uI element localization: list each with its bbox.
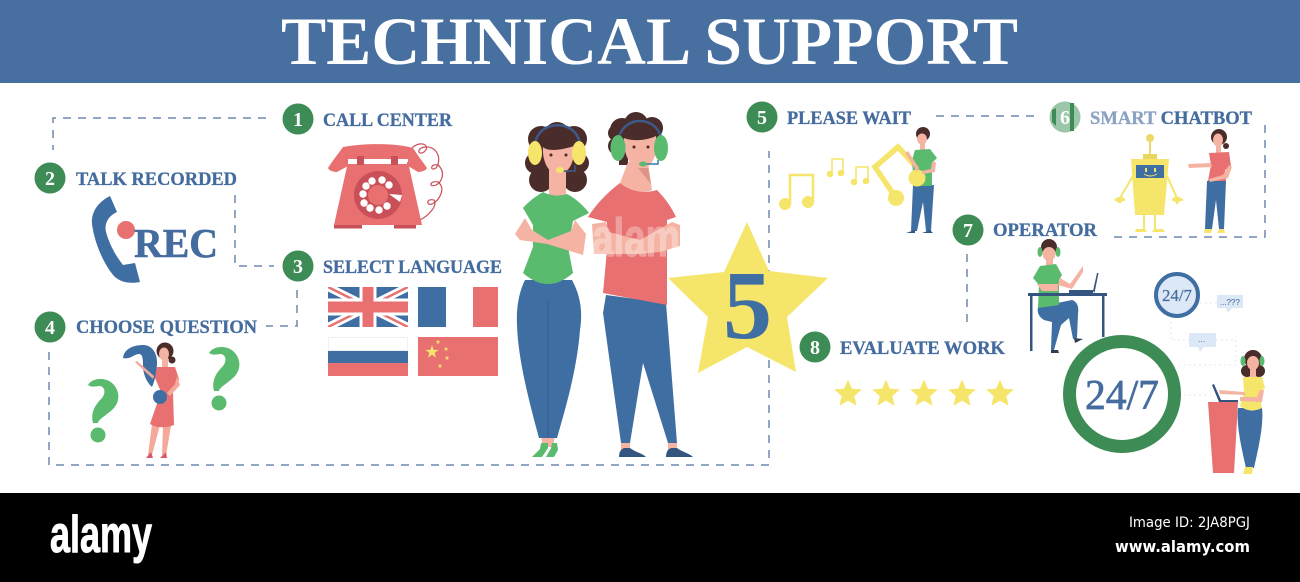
badge 7: 7: [963, 220, 973, 242]
badge 2: [34, 162, 66, 194]
icon: handset with REC: REC: [134, 220, 218, 266]
faint dotted links: [1171, 303, 1236, 395]
eyes and mouth: [550, 154, 568, 156]
red t-shirt: [588, 183, 676, 305]
badge 2: 2: [45, 168, 55, 190]
step 6: smart chatbot: [1050, 102, 1252, 233]
headset: [610, 121, 668, 166]
figure: woman with question mark: [123, 342, 180, 458]
badge 1: 1: [293, 109, 303, 131]
neck shadow: [638, 168, 651, 184]
icon: green question mark left: [88, 379, 118, 442]
image id: Image ID: 2JA8PGJ: [1129, 515, 1250, 531]
speech bubble: question: ...???: [1220, 297, 1240, 307]
flag: france: [418, 287, 498, 327]
shoes: [619, 448, 693, 457]
badge 6: 6: [1060, 107, 1070, 129]
logo: alamy: alamy: [50, 506, 152, 564]
step 1: call center: [282, 104, 452, 228]
flag: china: [418, 337, 498, 376]
badge 3: [282, 250, 314, 282]
central figure: male operator: [588, 112, 693, 457]
five star rating: [834, 380, 1014, 406]
large 24/7 ring: 24/7: [1085, 373, 1159, 419]
badge 4: [34, 312, 66, 342]
badge 7: [952, 214, 984, 246]
heading: call center: CALL CENTER: [323, 110, 452, 131]
speech bubble: dots: ...: [1198, 334, 1205, 344]
large 24/7 ring: [1070, 342, 1174, 446]
central figure: female operator: [515, 122, 589, 457]
eyes: [632, 146, 650, 148]
face: [624, 136, 656, 168]
heading: choose question: CHOOSE QUESTION: [76, 317, 257, 338]
watermark: alam: [592, 208, 680, 268]
step 5: please wait: [746, 102, 937, 233]
face: [543, 146, 574, 174]
figure: standing woman with laptop: [1208, 350, 1265, 474]
title banner: [0, 0, 1300, 83]
green blouse: [523, 192, 589, 284]
dashed connectors between steps: [49, 116, 1265, 465]
flag: united kingdom: [328, 287, 408, 327]
icon: rotary telephone: [328, 144, 442, 228]
hair: [525, 122, 589, 192]
trousers: [517, 280, 581, 438]
hair: [608, 112, 663, 165]
heading: smart chatbot: SMART CHATBOT: [1090, 108, 1252, 129]
headset: [528, 125, 586, 173]
trouser crease: [547, 300, 549, 438]
step 4: choose question: [34, 312, 257, 458]
trousers: [603, 295, 677, 443]
badge 5: 5: [757, 107, 767, 129]
step 7: operator: [952, 214, 1107, 353]
small 24/7 ring: [1156, 274, 1198, 316]
badge 4: 4: [45, 317, 55, 339]
badge 3: 3: [293, 256, 303, 278]
badge 8: [800, 332, 830, 362]
heading: evaluate work: EVALUATE WORK: [840, 338, 1005, 359]
title banner: TECHNICAL SUPPORT: [281, 3, 1018, 79]
badge 1: [282, 104, 314, 134]
step 3: select language: [282, 250, 502, 376]
heading: operator: OPERATOR: [993, 220, 1097, 241]
ankles: [541, 436, 555, 447]
heading: select language: SELECT LANGUAGE: [323, 257, 502, 278]
big yellow star with 5: 5: [723, 252, 772, 360]
24/7 support cluster: [1070, 274, 1265, 474]
badge 5: [746, 102, 778, 132]
icon: musical notes: [780, 147, 919, 210]
crossed arms: [592, 222, 680, 254]
speech bubble: dots: [1189, 333, 1216, 352]
figure: seated operator at desk: [1028, 239, 1107, 353]
step 2: talk recorded: [34, 162, 237, 283]
badge 6: [1050, 102, 1080, 132]
flag: russia: [328, 338, 408, 376]
heading: talk recorded: TALK RECORDED: [76, 169, 237, 190]
figure: man holding note: [905, 127, 937, 233]
step 8: evaluate work: [800, 332, 1014, 406]
speech bubble: question: [1217, 295, 1243, 313]
website: www.alamy.com: [1115, 537, 1250, 556]
neck: [549, 170, 566, 197]
footer bar: [0, 493, 1300, 582]
big yellow star with 5: [668, 222, 828, 373]
ankles: [621, 441, 677, 450]
badge 8: 8: [810, 337, 820, 359]
neck: [620, 162, 652, 192]
heading: please wait: PLEASE WAIT: [787, 108, 911, 129]
icon: robot: [1115, 134, 1183, 232]
small 24/7 ring: 24/7: [1162, 286, 1192, 305]
icon: green question mark right: [209, 347, 239, 410]
shoes: [532, 443, 558, 457]
figure: woman pointing at robot: [1188, 129, 1232, 233]
icon: handset with REC: [92, 196, 218, 283]
crossed arms: [515, 218, 586, 255]
